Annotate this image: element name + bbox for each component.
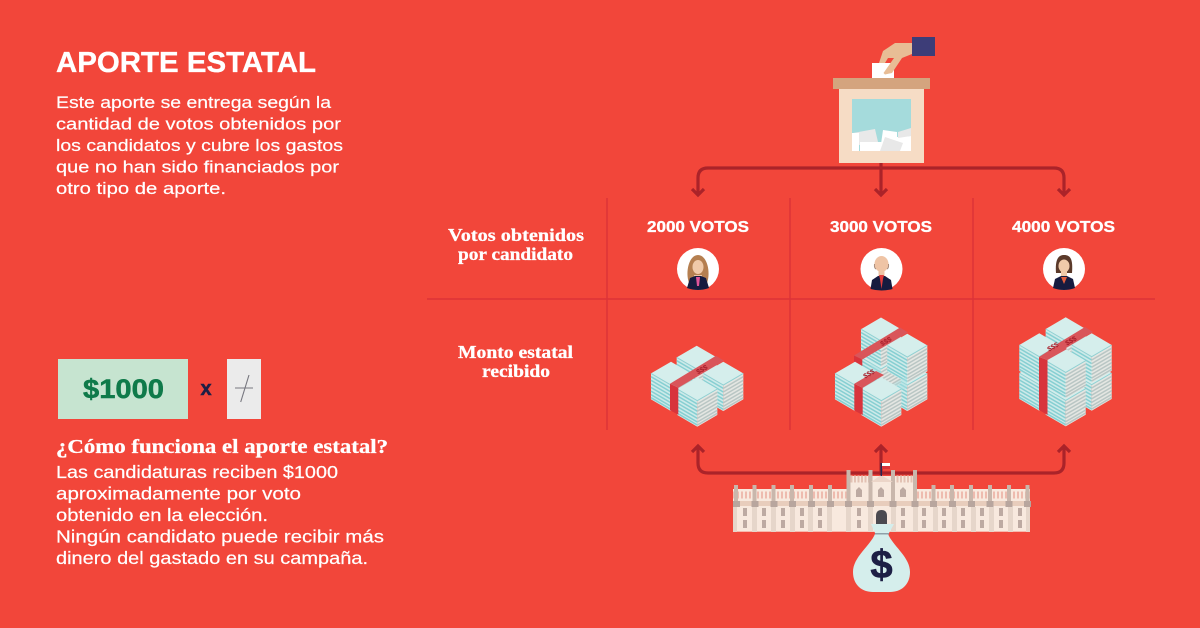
icon: government palace: [733, 463, 1031, 532]
how it works text block: obtenido en la elección.: [56, 505, 268, 525]
title: APORTE ESTATAL: [56, 47, 316, 79]
intro text block: que no han sido financiados por: [56, 158, 339, 176]
formula: amount times votes: [58, 359, 261, 419]
money pile: 4000 votes: $$$: [1046, 342, 1060, 353]
column heading: 4000 votos: 4000 VOTOS: [1012, 219, 1115, 236]
row label: amount: [458, 342, 573, 381]
money pile: 2000 votes: [651, 346, 743, 427]
icon: candidate woman with long hair: [677, 248, 719, 290]
arrows from palace to money piles: [692, 446, 1070, 475]
arrows from ballot box to candidates: [692, 163, 1070, 195]
formula: amount times votes: x: [200, 378, 212, 400]
table grid: [427, 198, 1155, 430]
icon: ballot box: [833, 37, 935, 163]
intro text block: Este aporte se entrega según la: [56, 93, 332, 112]
intro text block: [56, 93, 343, 198]
icon: candidate woman with dark hair: [1043, 248, 1085, 290]
row label: votes: Votos obtenidos: [448, 225, 584, 245]
money pile: 3000 votes: $$$: [862, 369, 876, 380]
row label: votes: [448, 225, 584, 264]
column heading: 3000 votos: 3000 VOTOS: [830, 219, 932, 236]
money pile: 3000 votes: [835, 318, 927, 427]
row label: amount: recibido: [482, 361, 550, 381]
how it works text block: ¿Cómo funciona el aporte estatal?: [56, 436, 388, 458]
how it works text block: Ningún candidato puede recibir más: [56, 526, 384, 546]
intro text block: cantidad de votos obtenidos por: [56, 114, 341, 134]
intro text block: otro tipo de aporte.: [56, 179, 226, 198]
column heading: 2000 votos: 2000 VOTOS: [647, 219, 749, 236]
row label: votes: por candidato: [458, 244, 573, 264]
row label: amount: Monto estatal: [458, 342, 573, 362]
intro text block: los candidatos y cubre los gastos: [56, 136, 343, 155]
how it works text block: Las candidaturas reciben $1000: [56, 462, 338, 482]
how it works text block: aproximadamente por voto: [56, 484, 301, 504]
money pile: 4000 votes: [1019, 317, 1112, 426]
icon: money bag: [853, 524, 910, 592]
how it works text block: dinero del gastado en su campaña.: [56, 548, 368, 568]
icon: money bag: $: [870, 543, 893, 587]
icon: candidate bald man: [860, 248, 902, 290]
formula: amount times votes: $1000: [83, 374, 164, 404]
how it works text block: [56, 436, 388, 568]
